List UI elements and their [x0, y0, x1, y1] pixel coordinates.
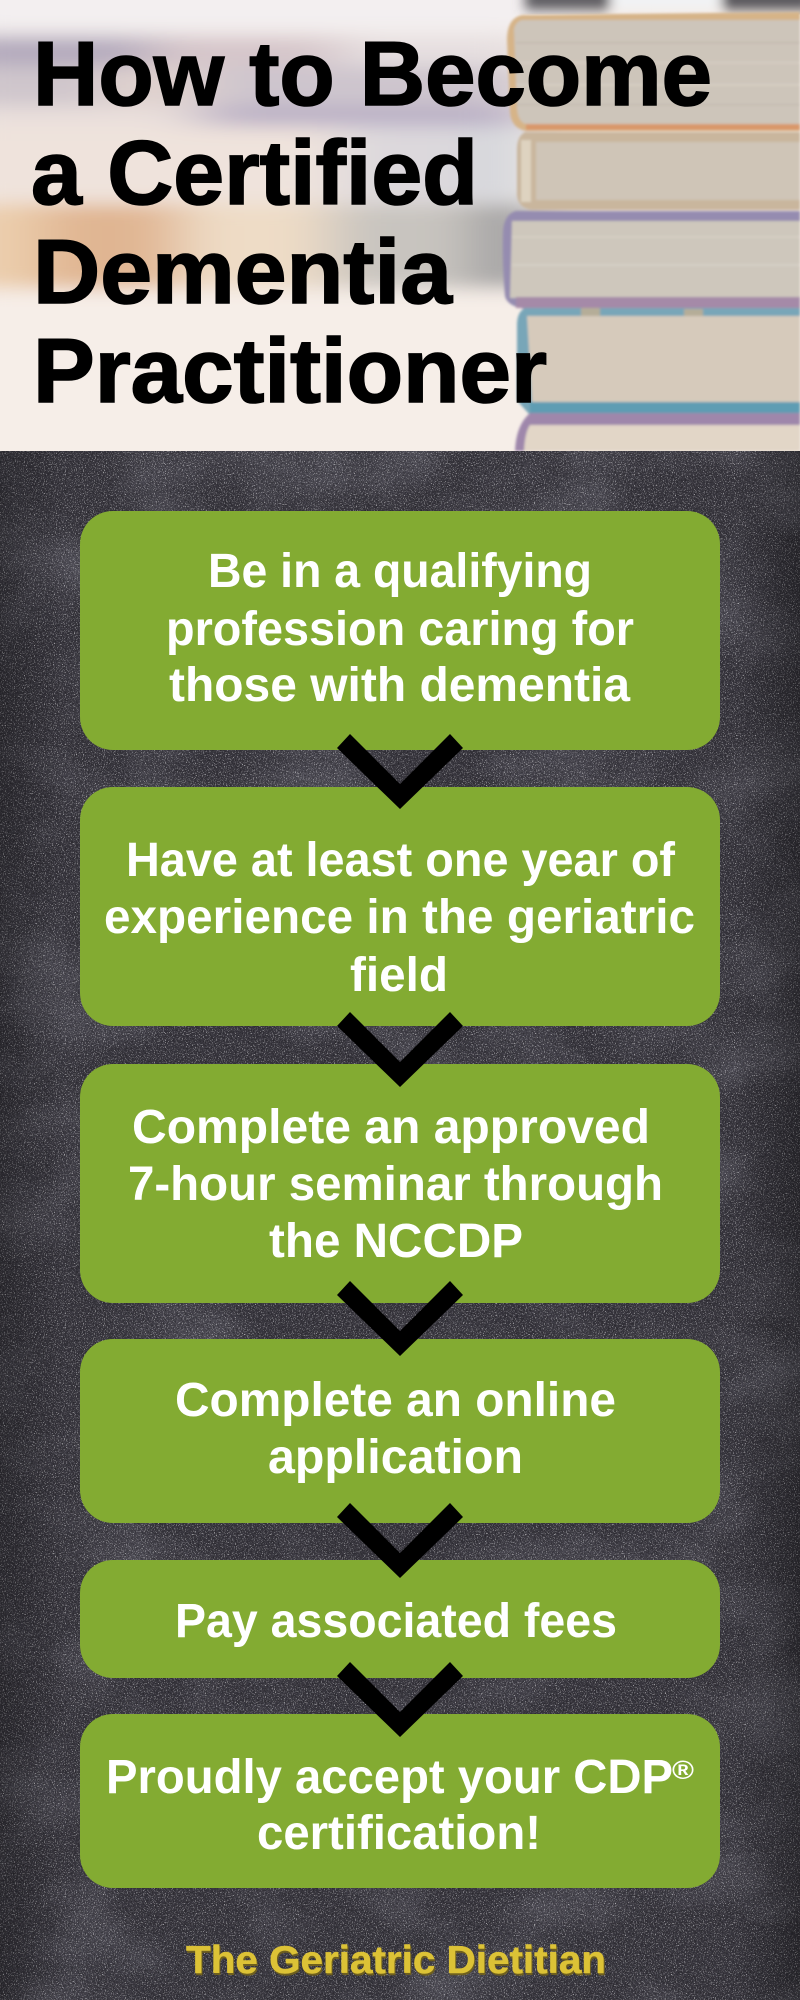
step 6: certification!	[257, 1807, 541, 1860]
arrow: step 2 to 3	[337, 1012, 463, 1087]
step 3	[80, 1064, 720, 1303]
step 5	[80, 1560, 720, 1678]
title: Practitioner	[33, 321, 547, 422]
step 5: Pay associated fees	[175, 1595, 617, 1648]
arrow: step 1 to 2	[337, 734, 463, 809]
step 6: Proudly accept your CDP	[106, 1751, 673, 1804]
book 1	[507, 12, 800, 131]
panel: header photo with stacked books	[0, 0, 800, 451]
step 4	[80, 1339, 720, 1523]
step 3: the NCCDP	[269, 1215, 523, 1268]
step 3: 7-hour seminar through	[128, 1158, 663, 1211]
title: a Certified	[31, 123, 478, 224]
book 2	[517, 132, 800, 210]
step 1: profession caring for	[166, 603, 634, 656]
panel: chalkboard background	[0, 451, 800, 2000]
step 2: field	[350, 949, 448, 1002]
title: Dementia	[33, 222, 453, 323]
step 2: experience in the geriatric	[104, 891, 695, 944]
step 1	[80, 511, 720, 750]
step 1: Be in a qualifying	[208, 545, 592, 598]
book 5	[515, 413, 800, 451]
step 3: Complete an approved	[132, 1101, 650, 1154]
step 6	[80, 1714, 720, 1888]
step 2	[80, 787, 720, 1026]
step 4: application	[268, 1431, 523, 1484]
step 1: those with dementia	[169, 659, 630, 712]
step 4: Complete an online	[175, 1374, 616, 1427]
title: How to Become	[33, 24, 712, 125]
book 3	[503, 211, 800, 309]
step 6: ®	[672, 1755, 694, 1785]
title	[31, 24, 712, 422]
arrow: step 5 to 6	[337, 1662, 463, 1737]
step 2: Have at least one year of	[126, 834, 676, 887]
arrow: step 3 to 4	[337, 1281, 463, 1356]
book 4	[517, 308, 800, 415]
blurred background	[0, 0, 800, 451]
footer credit: The Geriatric Dietitian	[186, 1939, 606, 1982]
arrow: step 4 to 5	[337, 1503, 463, 1578]
books stack	[503, 12, 800, 451]
